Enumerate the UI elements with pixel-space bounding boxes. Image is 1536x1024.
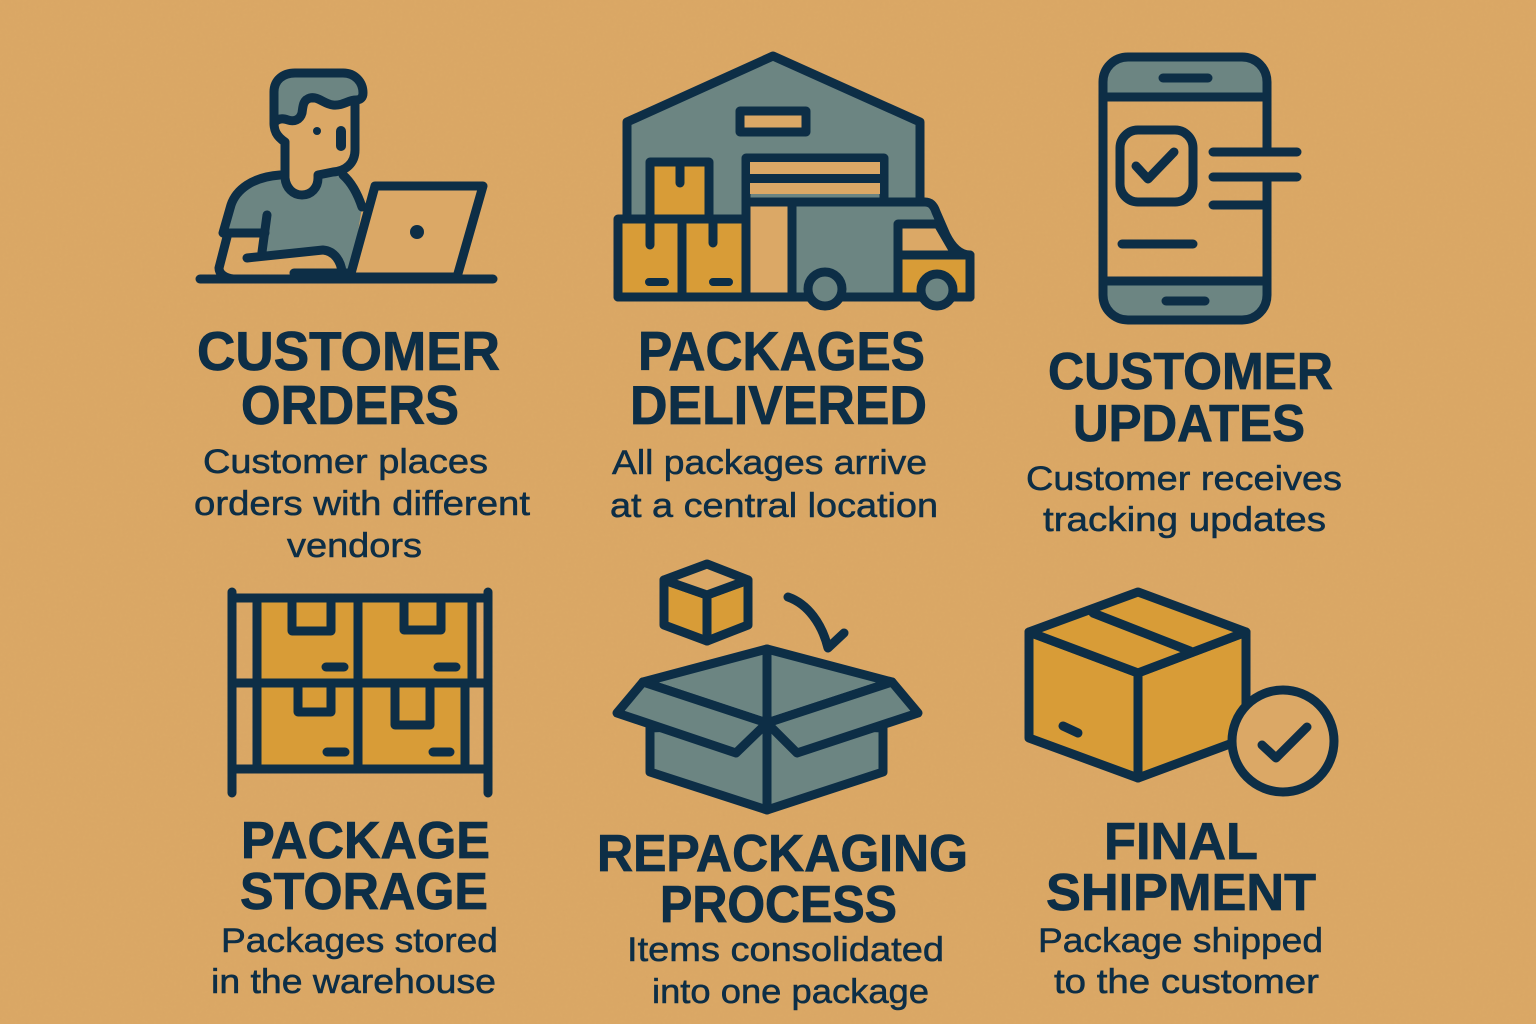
- panel: customer orders: [194, 73, 531, 565]
- icon: small cube: [664, 564, 748, 641]
- icon: item going into open box: [617, 564, 918, 810]
- text: customer updates description: Customer receives: [1026, 460, 1342, 498]
- icon: warehouse with boxes and truck: [618, 56, 970, 306]
- icon: storage shelf with boxes: [232, 592, 488, 793]
- heading: packages delivered: DELIVERED: [630, 374, 927, 436]
- text: customer updates description: [1026, 460, 1342, 539]
- text: final shipment description: [1038, 922, 1323, 1001]
- text: package storage description: in the warehouse: [211, 963, 496, 1001]
- heading: package storage: PACKAGE: [241, 812, 490, 870]
- text: package storage description: [211, 922, 498, 1001]
- heading: packages delivered: PACKAGES: [638, 320, 925, 382]
- heading: repackaging process: [597, 825, 968, 934]
- text: customer orders description: [194, 443, 531, 565]
- heading: customer orders: CUSTOMER: [197, 320, 500, 382]
- icon: open box: [617, 649, 918, 810]
- panel: final shipment: [1029, 592, 1334, 1001]
- text: packages delivered description: All packages arrive: [612, 444, 927, 482]
- heading: customer orders: ORDERS: [241, 374, 459, 436]
- text: final shipment description: to the customer: [1054, 963, 1319, 1001]
- text: customer orders description: vendors: [287, 527, 422, 565]
- heading: customer updates: CUSTOMER: [1048, 343, 1333, 401]
- heading: customer updates: UPDATES: [1073, 395, 1305, 453]
- heading: customer updates: [1048, 343, 1333, 453]
- text: packages delivered description: at a central location: [610, 487, 938, 525]
- panel: repackaging process: [597, 564, 968, 1011]
- heading: customer orders: [197, 320, 500, 436]
- heading: final shipment: FINAL: [1104, 813, 1258, 871]
- heading: package storage: [240, 812, 490, 921]
- heading: package storage: STORAGE: [240, 863, 488, 921]
- text: customer orders description: orders with different: [194, 485, 531, 523]
- icon: person at laptop: [200, 73, 493, 279]
- heading: final shipment: [1046, 813, 1316, 922]
- icon: phone with check: [1103, 57, 1297, 320]
- heading: repackaging process: REPACKAGING: [597, 825, 968, 883]
- panel: customer updates: [1026, 57, 1342, 539]
- text: final shipment description: Package shipped: [1038, 922, 1323, 960]
- text: repackaging description: into one package: [652, 973, 929, 1011]
- text: repackaging description: Items consolidated: [627, 931, 944, 969]
- text: package storage description: Packages stored: [221, 922, 498, 960]
- text: packages delivered description: [610, 444, 938, 525]
- heading: repackaging process: PROCESS: [660, 876, 897, 934]
- arrow: into box: [788, 597, 844, 648]
- heading: final shipment: SHIPMENT: [1046, 864, 1316, 922]
- panel: packages delivered: [610, 56, 970, 525]
- icon: sealed box with check badge: [1029, 592, 1334, 792]
- text: customer updates description: tracking updates: [1043, 501, 1326, 539]
- text: customer orders description: Customer places: [203, 443, 488, 481]
- panel: package storage: [211, 592, 498, 1001]
- heading: packages delivered: [630, 320, 927, 436]
- text: repackaging description: [627, 931, 944, 1011]
